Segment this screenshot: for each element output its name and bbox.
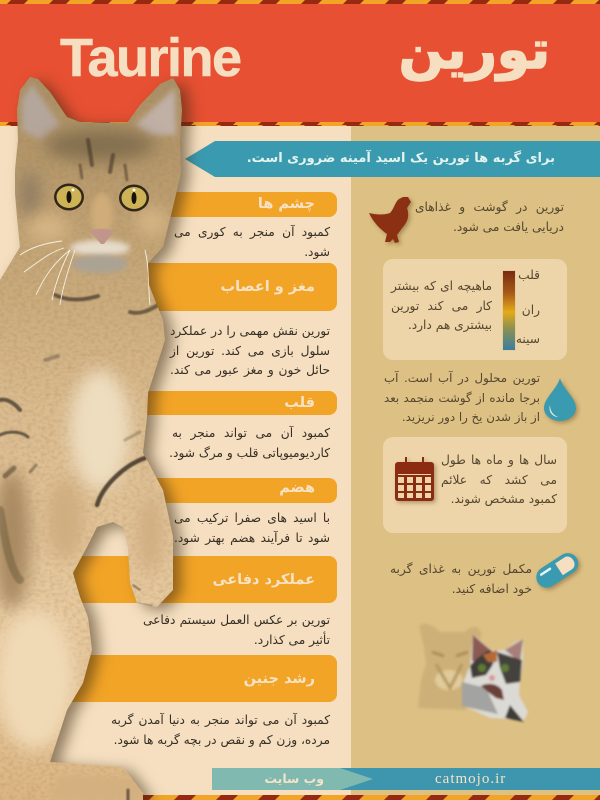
- label: heart: قلب: [518, 268, 540, 282]
- text: water soluble: برجا مانده از گوشت منجمد بعد: [384, 391, 540, 405]
- text: meat and seafood: دریایی یافت می شود.: [453, 220, 564, 234]
- text: heart: کاردیومیوپاتی قلب و مرگ شود.: [169, 446, 330, 460]
- text: brain and nerves: حائل خون و مغز عبور می کند.: [170, 363, 330, 377]
- icon: pill: [536, 553, 582, 592]
- footer bar: [212, 768, 600, 790]
- text: fetal growth: مرده، وزن کم و نقص در بچه گربه ها شود.: [114, 733, 330, 747]
- heading bar: immune function: عملکرد دفاعی: [213, 572, 315, 588]
- heading bar: eyes: چشم ها: [258, 196, 315, 212]
- text: brain and nerves: سلول بازی می کند. تورین از: [170, 344, 330, 358]
- footer teal band: [212, 768, 600, 790]
- text: heart: کمبود آن می تواند منجر به: [172, 426, 330, 440]
- text: eyes: کمبود آن منجر به کوری می: [174, 225, 330, 239]
- heading bar: digestion: هضم: [279, 480, 315, 496]
- text: digestion: شود تا فرآیند هضم بهتر شود.: [174, 531, 330, 545]
- text: time to symptoms: می کشد که علائم: [441, 473, 557, 487]
- footer label: وب سایت: [264, 771, 324, 786]
- text: immune function: تورین بر عکس العمل سیستم دفاعی: [143, 613, 330, 627]
- heading bar: fetal growth: [50, 655, 337, 702]
- text: brain and nerves: تورین نقش مهمی را در عملکرد: [170, 324, 330, 338]
- text: eyes: شود.: [304, 245, 330, 259]
- text: brain and nerves: [170, 324, 330, 377]
- cat photo: [0, 74, 199, 800]
- heading bar: immune function: [50, 556, 337, 603]
- label: breast: سینه: [516, 332, 540, 346]
- heading bar: brain and nerves: مغز و اعصاب: [221, 279, 315, 295]
- text: supplement: مکمل تورین به غذای گربه: [390, 562, 532, 576]
- text: eyes: [174, 224, 330, 259]
- panel: muscle taurine: [383, 259, 567, 360]
- footer url: catmojo.ir: [435, 771, 506, 787]
- text: digestion: با اسید های صفرا ترکیب می: [174, 511, 330, 525]
- cat right eye: [119, 184, 149, 212]
- header band: [0, 0, 600, 126]
- text: immune function: [143, 613, 330, 647]
- top banner: [185, 141, 600, 177]
- icon: water drop: [544, 378, 580, 425]
- text: digestion: [174, 511, 330, 545]
- heading bar: eyes: [50, 192, 337, 217]
- text: meat and seafood: تورین در گوشت و غذاهای: [415, 200, 564, 214]
- text: muscle: [390, 279, 492, 332]
- heading bar: digestion: [50, 478, 337, 503]
- text: time to symptoms: سال ها و ماه ها طول: [441, 453, 557, 467]
- icon: calendar: [394, 457, 438, 506]
- text: fetal growth: کمبود آن می تواند منجر به دنیا آمدن گربه: [111, 713, 330, 727]
- text: water soluble: از باز شدن یخ را دور نریزید.: [402, 410, 540, 424]
- cat left eye: [54, 184, 84, 210]
- text: immune function: تأثیر می کذارد.: [254, 633, 330, 647]
- text: supplement: [390, 562, 532, 596]
- text: fetal growth: [111, 712, 330, 747]
- heading bar: fetal growth: رشد جنین: [244, 671, 315, 687]
- right column background: [351, 122, 600, 800]
- text: muscle: بیشتری هم دارد.: [408, 318, 492, 332]
- text: meat and seafood: [415, 200, 564, 234]
- text: water soluble: [384, 370, 540, 424]
- text: supplement: خود اضافه کنید.: [452, 582, 532, 596]
- text: heart: [169, 426, 330, 460]
- text: muscle: ماهیچه ای که بیشتر: [391, 279, 492, 293]
- text: time to symptoms: [441, 453, 558, 506]
- footer label arrow: [212, 768, 373, 790]
- label: thigh: ران: [522, 303, 540, 317]
- text: muscle: کار می کند تورین: [391, 299, 492, 313]
- image: puma and calico cat: [418, 624, 529, 724]
- icon: chicken: [369, 197, 414, 246]
- top banner: برای گربه ها تورین یک اسید آمینه ضروری است.: [247, 151, 555, 166]
- calico cat: [462, 635, 528, 722]
- cat body silhouette: [0, 77, 182, 800]
- title: Persian: تورین: [399, 20, 550, 81]
- cat stripes: [0, 140, 158, 800]
- text: water soluble: تورین محلول در آب است. آب: [384, 371, 540, 385]
- text: time to symptoms: کمبود مشخص شوند.: [451, 492, 557, 506]
- title: Taurine: Taurine: [60, 28, 241, 88]
- heading bar: heart: قلب: [284, 395, 315, 411]
- heading bar: heart: [50, 391, 337, 415]
- cat fur shading: [0, 84, 176, 800]
- cat whiskers: [20, 241, 150, 305]
- panel: time to symptoms: [383, 437, 567, 533]
- cat nose: [90, 229, 114, 244]
- gradient bar: [502, 270, 516, 351]
- heading bar: brain and nerves: [50, 263, 337, 311]
- puma: [418, 624, 481, 710]
